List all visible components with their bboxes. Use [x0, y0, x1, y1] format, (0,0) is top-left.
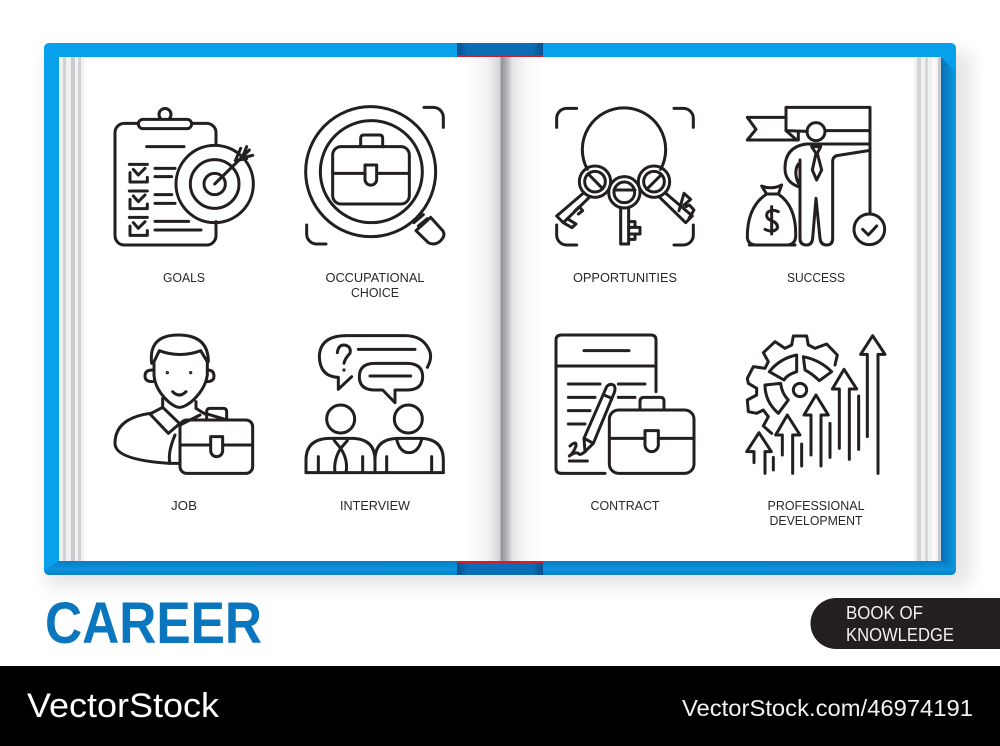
label: professional development second line: DEVELOPMENT: [770, 513, 863, 528]
label: interview: INTERVIEW: [340, 498, 411, 513]
panel: open book: [44, 43, 956, 575]
footer bar: [0, 666, 1000, 746]
bottom spine band: [457, 561, 543, 575]
icon: clipboard with target: [115, 109, 253, 245]
book cover: [44, 43, 956, 575]
panel: occupational choice: [306, 107, 444, 300]
panel: professional development: [747, 336, 885, 528]
icon: key ring: [557, 108, 694, 245]
label: opportunities: OPPORTUNITIES: [573, 270, 677, 285]
label: goals: GOALS: [163, 270, 205, 285]
icon: man with briefcase: [115, 335, 253, 473]
top spine band: [457, 43, 543, 57]
center gutter: [462, 57, 544, 561]
callout: book of knowledge: [810, 598, 1000, 649]
callout: book of knowledge: BOOK OF: [846, 603, 923, 623]
label: job: JOB: [171, 498, 197, 513]
panel: interview: [306, 336, 443, 513]
right page edges: [914, 57, 941, 561]
icon: document, pen and briefcase: [556, 335, 694, 473]
title: CAREER: [45, 591, 262, 656]
icon: businessman with flag and money bag: [747, 107, 885, 245]
panel: goals: [115, 109, 253, 285]
label: professional development: PROFESSIONAL: [768, 498, 864, 513]
right inner cover shading: [941, 57, 956, 570]
icon: two people with speech bubbles: [306, 336, 443, 473]
label: success: SUCCESS: [787, 270, 845, 285]
bottom cover strip: [44, 561, 956, 575]
panel: job: [115, 335, 253, 513]
panel: success: [747, 107, 885, 285]
footer url: VectorStock.com/46974191: [682, 695, 973, 721]
icon: gear with rising arrows: [747, 336, 885, 473]
book shadow: [46, 52, 971, 586]
panel: contract: [556, 335, 694, 513]
pages: [59, 57, 941, 561]
panel: opportunities: [557, 108, 694, 285]
label: occupational choice: OCCUPATIONAL: [326, 270, 424, 285]
footer brand: VectorStock: [27, 687, 220, 725]
callout: book of knowledge: KNOWLEDGE: [846, 625, 954, 645]
left page edges: [59, 57, 87, 561]
icon: magnifier with briefcase: [306, 107, 444, 244]
label: occupational choice second line: CHOICE: [351, 285, 399, 300]
label: contract: CONTRACT: [590, 498, 660, 513]
